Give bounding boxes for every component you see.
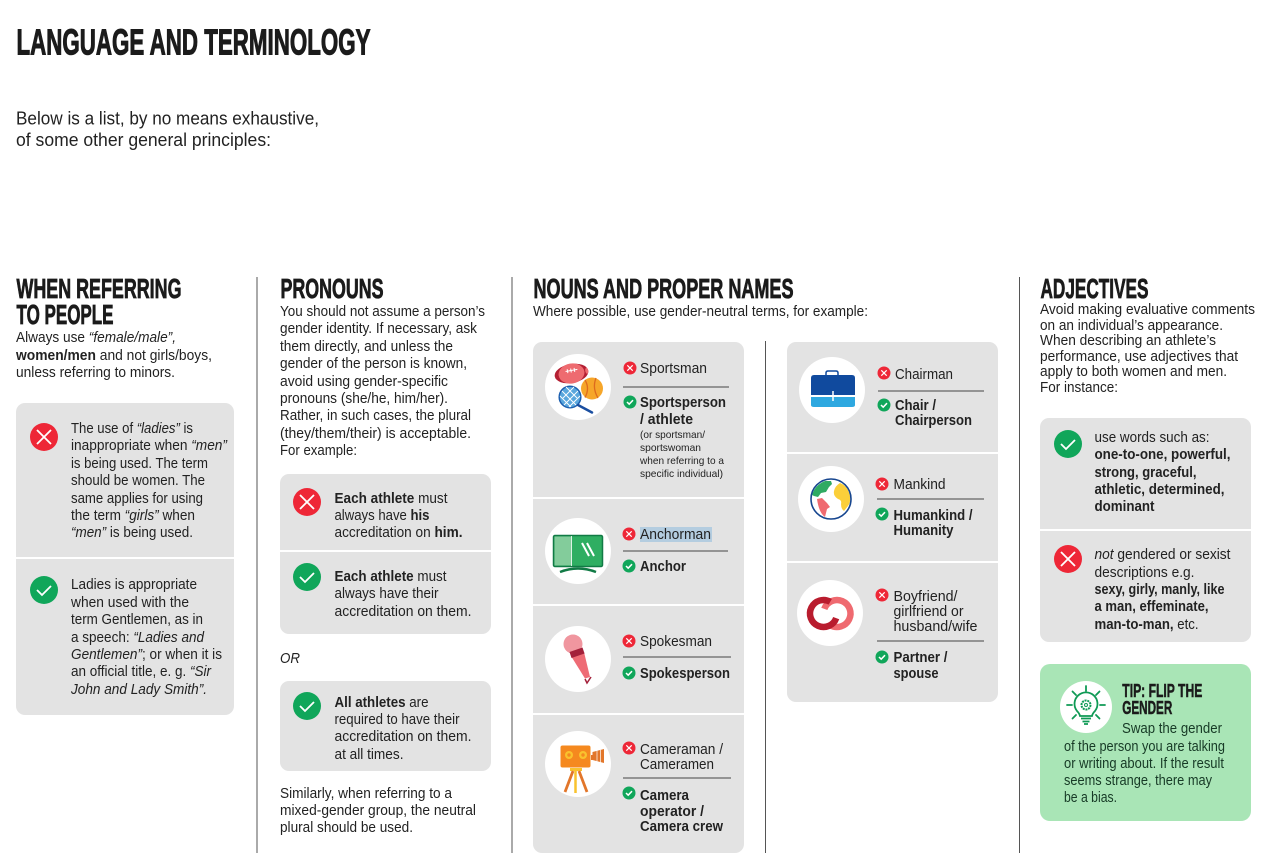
row: cameraman: Camera crew	[640, 819, 724, 835]
text: words to use	[1094, 430, 1231, 515]
panel: adjective examples	[1040, 418, 1251, 642]
section: when referring to people	[15, 273, 234, 715]
text: ladies appropriate: when used with the	[70, 595, 189, 611]
text: correct pronoun: Each athlete must	[334, 569, 447, 585]
intro text: adjectives: apply to both women and men.	[1040, 364, 1227, 380]
tip heading	[1122, 680, 1202, 718]
intro text: of some other general principles:	[16, 130, 271, 150]
row: spokesman: Spokesperson	[640, 666, 730, 682]
column dividers	[257, 277, 1020, 853]
tip body text: or writing about. If the result	[1064, 756, 1224, 772]
text: words to use: dominant	[1094, 499, 1155, 515]
row: boyfriend: girlfriend or	[894, 604, 964, 620]
text: ladies inappropriate: the term “girls” when	[71, 508, 195, 524]
text: words to use: strong, graceful,	[1094, 465, 1197, 481]
row: sportsman	[623, 361, 729, 480]
closing text: pronouns: mixed-gender group, the neutral	[280, 803, 476, 819]
row: sportsman: (or sportsman/	[640, 429, 705, 441]
tip body text: be a bias.	[1064, 790, 1117, 806]
section: nouns and proper names	[533, 273, 998, 853]
row: sportsman: Sportsperson	[640, 395, 726, 411]
text: ladies appropriate: Gentlemen”; or when it is	[71, 647, 222, 663]
row: cameraman: operator /	[640, 804, 704, 820]
heading: when referring to people	[16, 273, 182, 330]
icon: video camera	[545, 731, 611, 797]
panel: nouns right	[787, 342, 998, 702]
tip body text: of the person you are talking	[1064, 739, 1225, 755]
text: ladies inappropriate: The use of “ladies” is	[71, 421, 193, 437]
text: correct pronoun	[334, 569, 472, 620]
row: anchorman	[622, 527, 728, 575]
row: sportsman: specific individual)	[640, 468, 723, 480]
closing text: pronouns: Similarly, when referring to a	[280, 786, 452, 802]
intro text: adjectives: When describing an athlete’s	[1040, 333, 1216, 349]
heading: nouns and proper names: NOUNS AND PROPER NAMES	[534, 273, 794, 304]
text: correct pronoun: always have their	[334, 586, 439, 602]
tip body text: seems strange, there may	[1064, 773, 1213, 789]
tip body text	[1064, 721, 1225, 806]
text: plural example: All athletes are	[334, 695, 429, 711]
row: cameraman: Cameraman /	[640, 742, 723, 758]
text: words to avoid	[1094, 547, 1231, 633]
row: mankind: Humanity	[894, 523, 954, 539]
text: incorrect pronoun	[334, 491, 462, 541]
row: cameraman	[622, 742, 731, 835]
row: chairman: Chair /	[895, 398, 936, 414]
icon: check	[293, 692, 321, 720]
intro text: pronouns: pronouns (she/he, him/her).	[280, 391, 448, 407]
icon: light bulb	[1060, 681, 1112, 733]
text: words to avoid: man-to-man, etc.	[1094, 617, 1198, 633]
text: words to avoid: descriptions e.g.	[1094, 565, 1194, 581]
row: spokesman: Spokesman	[640, 634, 712, 650]
text: words to use: athletic, determined,	[1094, 482, 1225, 498]
row: mankind: Humankind /	[894, 508, 973, 524]
text: ladies inappropriate: same applies for using	[71, 491, 203, 507]
tip heading: TIP: FLIP THE	[1122, 680, 1202, 701]
icon: briefcase	[799, 357, 865, 423]
icon: cross	[1054, 545, 1082, 573]
text: plural example: required to have their	[334, 712, 460, 728]
text: ladies inappropriate	[71, 421, 228, 541]
text: ladies inappropriate: “men” is being used.	[71, 525, 193, 541]
text: correct pronoun: accreditation on them.	[334, 604, 472, 620]
row: anchorman: Anchorman	[640, 527, 711, 543]
intro text: adjectives: For instance:	[1040, 380, 1118, 396]
text: ladies appropriate: a speech: “Ladies and	[71, 630, 205, 646]
row: sportsman: Sportsman	[640, 361, 707, 377]
intro text: pronouns: them directly, and unless the	[280, 339, 453, 355]
row: sportsman: / athlete	[640, 412, 693, 428]
row: boyfriend: Boyfriend/	[894, 589, 958, 605]
icon: sports balls	[545, 354, 611, 420]
panel: each athlete examples	[280, 474, 491, 634]
row: sportsman: when referring to a	[639, 455, 724, 467]
text: ladies appropriate	[70, 577, 222, 698]
icon: cross	[293, 488, 321, 516]
heading: when referring to people: WHEN REFERRING	[16, 273, 182, 304]
intro text	[16, 108, 319, 150]
title: LANGUAGE AND TERMINOLOGY	[16, 22, 370, 62]
intro text: Below is a list, by no means exhaustive,	[16, 108, 319, 128]
intro text: pronouns: avoid using gender-specific	[280, 374, 448, 390]
row: cameraman: Camera	[640, 788, 690, 804]
icon: check	[293, 563, 321, 591]
icon: microphone	[545, 626, 611, 692]
text: plural example: accreditation on them.	[334, 729, 472, 745]
text: ladies inappropriate: should be women. The	[71, 473, 205, 489]
intro text: pronouns: gender of the person is known,	[280, 356, 467, 372]
intro text: pronouns	[280, 304, 485, 459]
row: boyfriend: husband/wife	[894, 619, 978, 635]
panel: ladies examples	[16, 403, 234, 715]
text: ladies appropriate: John and Lady Smith”.	[70, 682, 207, 698]
tip body text: Swap the gender	[1122, 721, 1222, 737]
row: boyfriend: Partner /	[894, 650, 948, 666]
section: pronouns	[280, 273, 491, 836]
icon: check	[30, 576, 58, 604]
text: ladies appropriate: an official title, e. g. “Sir	[71, 664, 212, 680]
heading: when referring to people: TO PEOPLE	[16, 299, 114, 330]
intro text: pronouns: gender identity. If necessary, ask	[280, 321, 478, 337]
text: or: OR	[280, 651, 300, 667]
text: plural example	[334, 695, 472, 763]
intro text: pronouns: (they/them/their) is acceptable.	[280, 426, 471, 442]
text: ladies appropriate: term Gentlemen, as in	[71, 612, 203, 628]
row: chairman	[878, 366, 984, 429]
panel: nouns left	[533, 342, 744, 853]
icon: television	[545, 518, 611, 584]
intro text: adjectives: performance, use adjectives that	[1040, 349, 1238, 365]
closing text: pronouns: plural should be used.	[280, 820, 413, 836]
row: boyfriend	[876, 588, 984, 682]
text: ladies appropriate: Ladies is appropriate	[71, 577, 197, 593]
intro text: adjectives: on an individual’s appearance.	[1040, 318, 1223, 334]
panel: all athletes example	[280, 681, 491, 771]
text: incorrect pronoun: Each athlete must	[334, 491, 448, 507]
text: ladies inappropriate: inappropriate when “men”	[71, 438, 228, 454]
row: cameraman: Cameramen	[640, 757, 714, 773]
text: ladies inappropriate: is being used. The term	[71, 456, 208, 472]
intro text: pronouns: For example:	[280, 443, 357, 459]
row: sportsman: sportswoman	[640, 442, 701, 454]
row: chairman: Chairman	[895, 367, 953, 383]
row: chairman: Chairperson	[895, 413, 972, 429]
text: words to use: use words such as:	[1094, 430, 1210, 446]
intro text: people: unless referring to minors.	[16, 365, 175, 381]
heading: adjectives: ADJECTIVES	[1040, 273, 1148, 304]
intro text: people: Always use “female/male”,	[16, 330, 176, 346]
icon: linked rings	[797, 580, 863, 646]
intro text: nouns: Where possible, use gender-neutral terms, for example:	[533, 304, 868, 320]
text: words to avoid: sexy, girly, manly, like	[1094, 582, 1225, 598]
text: incorrect pronoun: always have his	[334, 508, 430, 524]
intro text: people: women/men and not girls/boys,	[15, 348, 212, 364]
icon: cross	[30, 423, 58, 451]
intro text: adjectives: Avoid making evaluative comments	[1040, 302, 1255, 318]
section: adjectives	[1040, 273, 1255, 821]
text: plural example: at all times.	[334, 747, 404, 763]
text: words to avoid: a man, effeminate,	[1094, 599, 1209, 615]
tip heading: GENDER	[1122, 697, 1172, 718]
intro text: pronouns: Rather, in such cases, the plural	[280, 408, 471, 424]
text: incorrect pronoun: accreditation on him.	[334, 525, 462, 541]
row: boyfriend: spouse	[894, 666, 939, 682]
intro text: adjectives	[1040, 302, 1255, 396]
text: words to use: one-to-one, powerful,	[1094, 447, 1231, 463]
panel: tip	[1040, 664, 1251, 821]
icon: check	[1054, 430, 1082, 458]
row: mankind	[876, 477, 984, 539]
row: anchorman: Anchor	[640, 559, 686, 575]
intro text: people	[15, 330, 212, 381]
heading: pronouns: PRONOUNS	[280, 273, 384, 304]
row: spokesman	[622, 634, 731, 682]
icon: globe	[798, 466, 864, 532]
text: words to avoid: not gendered or sexist	[1094, 547, 1231, 563]
row: mankind: Mankind	[894, 477, 946, 493]
intro text: pronouns: You should not assume a person’s	[280, 304, 485, 320]
closing text: pronouns	[280, 786, 476, 836]
